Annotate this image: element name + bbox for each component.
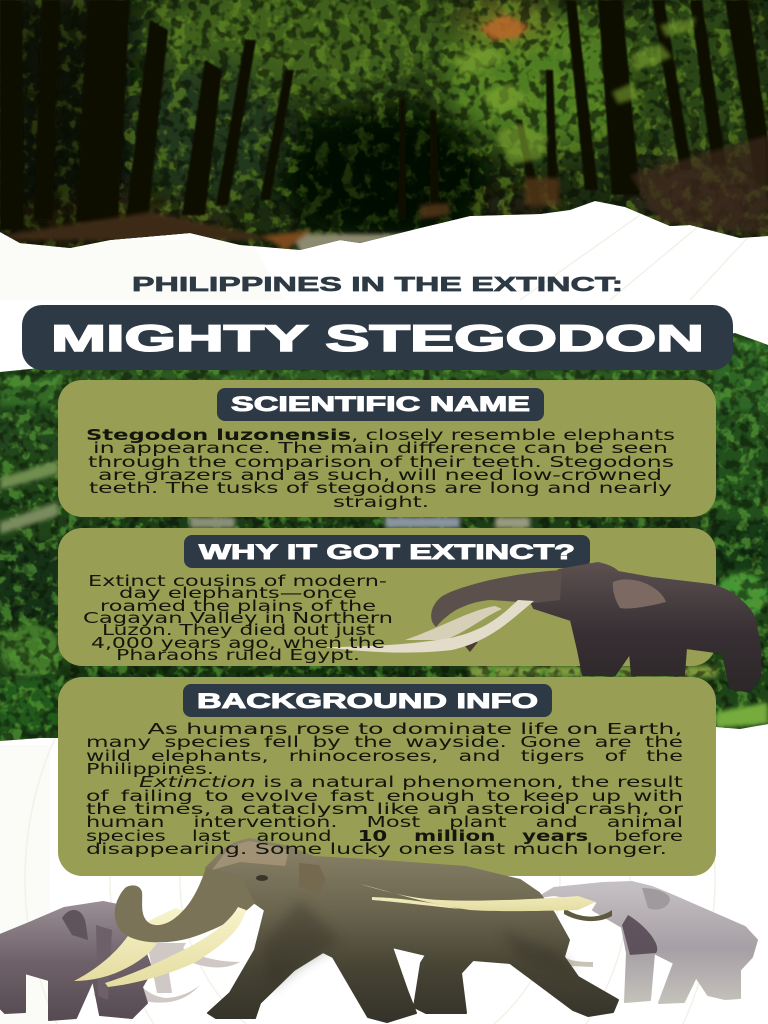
- title banner: [22, 305, 733, 370]
- text: why it got extinct: day elephants—once: [119, 584, 357, 602]
- trunk: [96, 925, 112, 1000]
- heading: background info: BACKGROUND INFO: [197, 689, 538, 713]
- leg shading: [262, 900, 575, 990]
- rear curved tusk: [529, 913, 593, 967]
- text: scientific name: through the comparison of their teeth. Stegodons: [88, 453, 674, 471]
- illustration: stegodon over terrace: [323, 563, 760, 692]
- text: background info: Philippines.: [86, 760, 214, 778]
- short right tusk: [372, 897, 460, 909]
- text: why it got extinct: Luzon. They died out just: [102, 621, 375, 639]
- text: scientific name: are grazers and as such, will need low-crowned: [98, 466, 662, 484]
- heading: why it got extinct: WHY IT GOT EXTINCT?: [199, 540, 575, 564]
- text: why it got extinct: 4,000 years ago, when the: [91, 634, 385, 652]
- rice terrace photo band: [0, 330, 768, 745]
- illustration: purple elephant left: [0, 902, 240, 1020]
- far tusk: [74, 908, 187, 981]
- chin tusk tip: [458, 638, 478, 652]
- text: background info: Extinction is a natural phenomenon, the result: [139, 773, 683, 791]
- text: background info: As humans rose to dominate life on Earth,: [148, 720, 682, 738]
- heading: scientific name: [217, 388, 544, 421]
- text: why it got extinct: Pharaohs ruled Egypt.: [116, 646, 360, 664]
- text: scientific name: straight.: [333, 493, 429, 511]
- text: background info: the times, a cataclysm like an asteroid crash, or: [86, 800, 684, 818]
- chest shadow: [622, 915, 657, 955]
- ear: [613, 579, 666, 609]
- heading: scientific name: SCIENTIFIC NAME: [231, 393, 530, 416]
- head highlight: [212, 841, 289, 870]
- text: background info: wild elephants, rhinoceroses, and tigers of the: [86, 747, 683, 765]
- ear: [642, 888, 670, 910]
- body: [0, 902, 152, 1020]
- eye: [256, 875, 268, 881]
- text: scientific name: in appearance. The main difference can be seen: [93, 439, 668, 457]
- text: background info: of failing to evolve fast enough to keep up with: [86, 787, 683, 805]
- heading: why it got extinct: [184, 535, 590, 568]
- subtitle: PHILIPPINES IN THE EXTINCT:: [132, 274, 623, 296]
- text: scientific name: [86, 426, 675, 511]
- trunk: [115, 868, 255, 942]
- text: why it got extinct: Cagayan Valley in Northern: [83, 609, 393, 627]
- text: background info: [86, 720, 684, 858]
- panel: background info: [58, 677, 716, 876]
- panel: scientific name: [58, 380, 716, 517]
- body: [206, 839, 618, 1022]
- elephant body: [530, 563, 760, 692]
- ear: [62, 910, 88, 940]
- second tusk: [405, 606, 502, 640]
- text: why it got extinct: [83, 572, 393, 664]
- text: background info: human intervention. Most plant and animal: [86, 813, 683, 831]
- tusk: [323, 600, 534, 653]
- panel: why it got extinct: [58, 528, 716, 666]
- illustration: grey elephant right: [539, 882, 757, 1003]
- text: why it got extinct: roamed the plains of the: [100, 597, 376, 615]
- illustration: main stegodon: [74, 839, 618, 1022]
- text: background info: species last around 10 million years before: [86, 827, 683, 845]
- long right tusk: [360, 884, 596, 911]
- text: scientific name: teeth. The tusks of stegodons are long and nearly: [89, 479, 672, 497]
- text: why it got extinct: Extinct cousins of modern-: [88, 572, 387, 590]
- trunk: [431, 570, 562, 627]
- ear: [299, 863, 326, 895]
- text: background info: disappearing. Some lucky ones last much longer.: [86, 840, 667, 858]
- heading: background info: [183, 684, 552, 717]
- forest photo banner: [0, 0, 768, 252]
- text: scientific name: Stegodon luzonensis , closely resemble elephants: [86, 426, 675, 444]
- text: background info: many species fell by the wayside. Gone are the: [86, 733, 683, 751]
- back elephant and curved tusks: [93, 943, 240, 1007]
- near tusk: [105, 907, 246, 987]
- trunk curl: [564, 908, 612, 921]
- title banner: MIGHTY STEGODON: [51, 318, 704, 359]
